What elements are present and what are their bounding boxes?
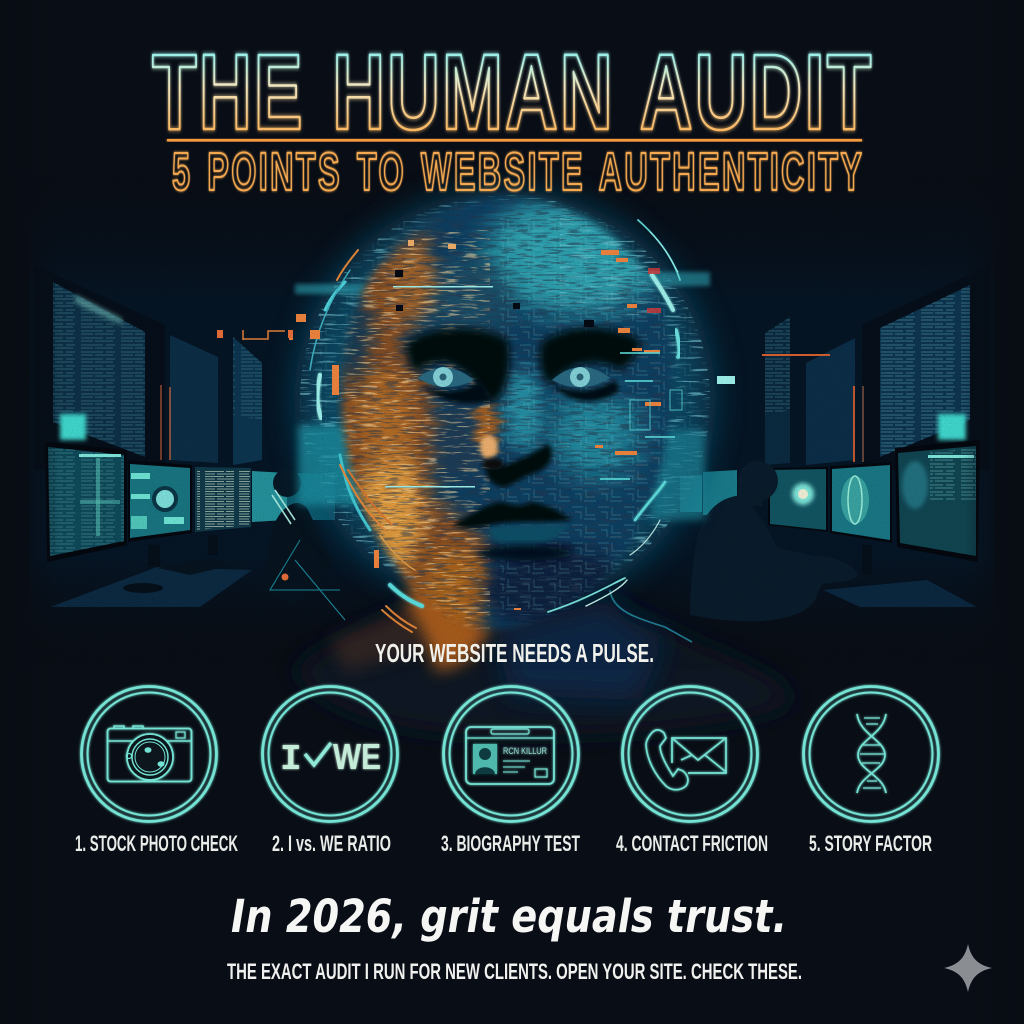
icon: id card [444, 686, 578, 822]
mouse [123, 583, 163, 593]
icon: dna helix [804, 686, 938, 822]
left desk [50, 535, 252, 607]
subtitle: 5 POINTS TO WEBSITE AUTHENTICITY [172, 143, 862, 202]
label: biography test: 3. BIOGRAPHY TEST [441, 831, 580, 856]
item 2: I vs WE ratio [262, 686, 398, 856]
chin shadow [477, 545, 573, 561]
icon: I check WE: I [280, 739, 302, 780]
icon: id card: RCN KILLUR [503, 746, 547, 756]
left operator silhouette [262, 469, 335, 605]
portrait: digital face [217, 185, 800, 735]
stands [148, 545, 160, 567]
mouth [452, 502, 572, 528]
nostril [482, 458, 504, 470]
texture overlay [0, 170, 1024, 670]
left wall screens [34, 265, 262, 470]
icon: phone and envelope [622, 686, 758, 822]
lower lip [488, 524, 570, 547]
item 5: story factor [804, 686, 938, 856]
left monitors [45, 442, 335, 562]
closing headline: In 2026, grit equals trust. [231, 890, 787, 943]
icon: I check WE [262, 686, 398, 822]
facial features [405, 328, 640, 561]
item 4: contact friction [616, 686, 768, 856]
item 3: biography test [441, 686, 580, 856]
icon: I check WE: WE [333, 736, 381, 777]
tagline: YOUR WEBSITE NEEDS A PULSE. [375, 638, 654, 668]
right desk [823, 545, 977, 607]
right neck rim [610, 590, 692, 642]
orange neck [408, 550, 492, 672]
label: story factor: 5. STORY FACTOR [809, 831, 932, 856]
glitch fragments [217, 240, 735, 620]
face skin [336, 194, 677, 632]
data halo glow [290, 185, 720, 615]
title: THE HUMAN AUDIT [152, 31, 871, 152]
scene: control room [30, 180, 994, 650]
right operator silhouette [690, 461, 858, 621]
title divider [167, 139, 862, 142]
nose highlight [480, 435, 498, 459]
under eye shadow [420, 380, 620, 404]
label: stock photo check: 1. STOCK PHOTO CHECK [75, 831, 238, 856]
left eye [418, 367, 474, 387]
hud ring arcs [310, 220, 680, 632]
shoulders [290, 600, 800, 735]
right brow and socket [540, 328, 640, 385]
icon: camera [82, 686, 216, 822]
right chest [495, 600, 665, 700]
right monitors [680, 440, 980, 562]
icon: sparkle [944, 944, 992, 992]
left shoulder tint [330, 605, 420, 672]
nose shadow [486, 444, 552, 487]
halo circuit texture [295, 195, 710, 605]
right wall screens [762, 265, 990, 470]
item 1: stock photo check [75, 686, 238, 856]
label: contact friction: 4. CONTACT FRICTION [616, 831, 768, 856]
right eye [552, 367, 610, 387]
left brow and socket [405, 328, 509, 402]
keyboard [158, 558, 232, 575]
label: I vs WE ratio: 2. I vs. WE RATIO [272, 831, 391, 856]
